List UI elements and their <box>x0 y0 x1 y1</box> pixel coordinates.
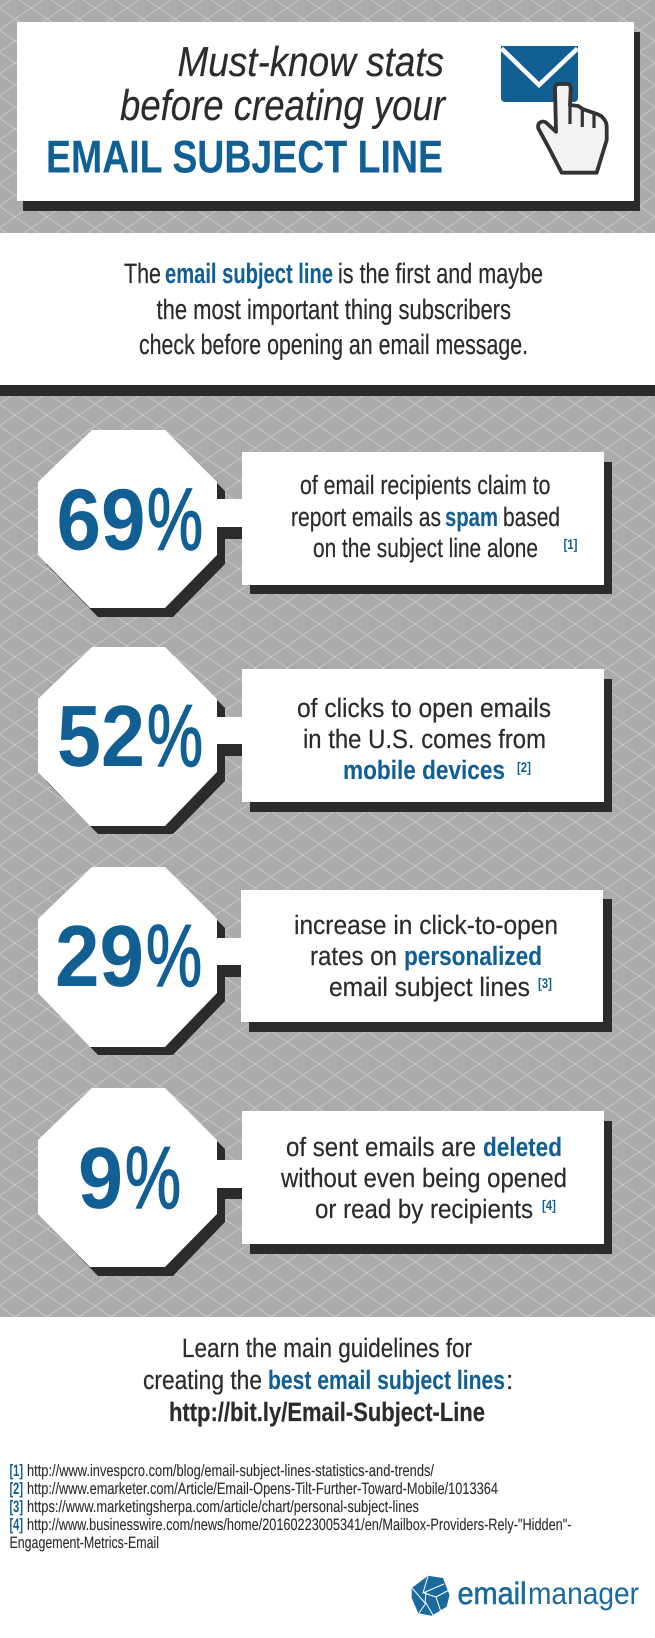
divider bar <box>0 385 655 396</box>
call to action text: creating the <box>143 1365 262 1395</box>
references list: http://www.emarketer.com/Article/Email-Opens-Tilt-Further-Toward-Mobile/1013364 <box>27 1480 498 1498</box>
number: 69 <box>56 472 146 568</box>
call to action text: http://bit.ly/Email-Subject-Line <box>169 1397 485 1427</box>
call to action text: Learn the main guidelines for <box>182 1333 472 1363</box>
number <box>78 1128 181 1227</box>
description: deleted <box>483 1132 562 1162</box>
intro text block <box>124 258 543 360</box>
icon: aperture mark <box>412 1576 450 1616</box>
references list: Engagement-Metrics-Email <box>10 1534 159 1552</box>
number <box>57 686 203 785</box>
call to action text: best email subject lines <box>268 1365 505 1395</box>
title line 3: EMAIL SUBJECT LINE <box>46 130 443 182</box>
intro text block: check before opening an email message. <box>139 329 528 360</box>
panel: stat 69% <box>38 430 612 617</box>
description: rates on <box>310 941 397 971</box>
octagon and card shadow <box>46 439 250 617</box>
octagon and card shadow <box>46 1097 250 1276</box>
title line 2: before creating your <box>120 82 446 130</box>
description: personalized <box>404 941 542 971</box>
title line 1: Must-know stats <box>178 38 444 85</box>
icon: envelope with pointing hand <box>501 46 607 173</box>
intro text block: The <box>124 258 161 289</box>
references list: [2] <box>10 1480 23 1498</box>
wordmark <box>458 1576 639 1611</box>
description: of sent emails are <box>286 1132 476 1162</box>
description: [4] <box>542 1197 556 1213</box>
number: 52 <box>57 688 145 785</box>
call to action text: : <box>506 1365 513 1395</box>
number: % <box>125 1128 181 1227</box>
panel: stat 29% <box>38 867 612 1055</box>
description <box>280 1132 567 1224</box>
description: of email recipients claim to <box>300 470 550 500</box>
intro text block: is the first and maybe <box>338 258 543 289</box>
octagon badge with connector and card <box>38 647 604 826</box>
panel: stat 52% <box>38 647 612 834</box>
description: without even being opened <box>280 1163 567 1193</box>
description: [3] <box>538 975 552 991</box>
number: % <box>147 686 203 785</box>
octagon and card shadow <box>46 876 250 1055</box>
wordmark: email <box>458 1576 526 1611</box>
number: % <box>147 470 203 568</box>
intro text block: the most important thing subscribers <box>156 294 511 325</box>
description: on the subject line alone <box>313 533 538 563</box>
references list: [3] <box>10 1498 23 1516</box>
description <box>294 910 558 1002</box>
description: report emails as <box>291 502 441 532</box>
description: based <box>503 502 560 532</box>
number <box>56 470 203 568</box>
number: 9 <box>78 1130 123 1227</box>
wordmark: manager <box>528 1576 639 1611</box>
octagon and card shadow <box>46 656 250 834</box>
number: % <box>146 906 202 1005</box>
description: in the U.S. comes from <box>303 724 546 754</box>
description: [2] <box>517 759 531 775</box>
panel: stat 9% <box>38 1088 612 1276</box>
header patterned band <box>0 0 655 233</box>
description <box>291 470 578 563</box>
references list: [1] <box>10 1462 23 1480</box>
octagon badge with connector and card <box>38 1088 604 1267</box>
stats patterned band <box>0 396 655 1317</box>
description: or read by recipients <box>315 1194 533 1224</box>
intro text block: email subject line <box>165 258 333 289</box>
call to action text <box>143 1333 513 1427</box>
octagon badge with connector and card <box>38 430 604 608</box>
description: mobile devices <box>343 755 505 785</box>
number: 29 <box>55 908 144 1005</box>
description: email subject lines <box>329 972 530 1002</box>
logo: emailmanager <box>412 1576 639 1616</box>
octagon badge with connector and card <box>38 867 603 1047</box>
references list <box>10 1462 572 1552</box>
description: increase in click-to-open <box>294 910 558 940</box>
panel: title <box>17 22 640 211</box>
description <box>297 693 551 785</box>
number <box>55 906 202 1005</box>
description: spam <box>445 502 498 532</box>
references list: http://www.invespcro.com/blog/email-subject-lines-statistics-and-trends/ <box>27 1462 434 1480</box>
description: of clicks to open emails <box>297 693 551 723</box>
references list: https://www.marketingsherpa.com/article/chart/personal-subject-lines <box>27 1498 419 1516</box>
description: [1] <box>564 536 578 552</box>
references list: [4] <box>10 1516 23 1534</box>
